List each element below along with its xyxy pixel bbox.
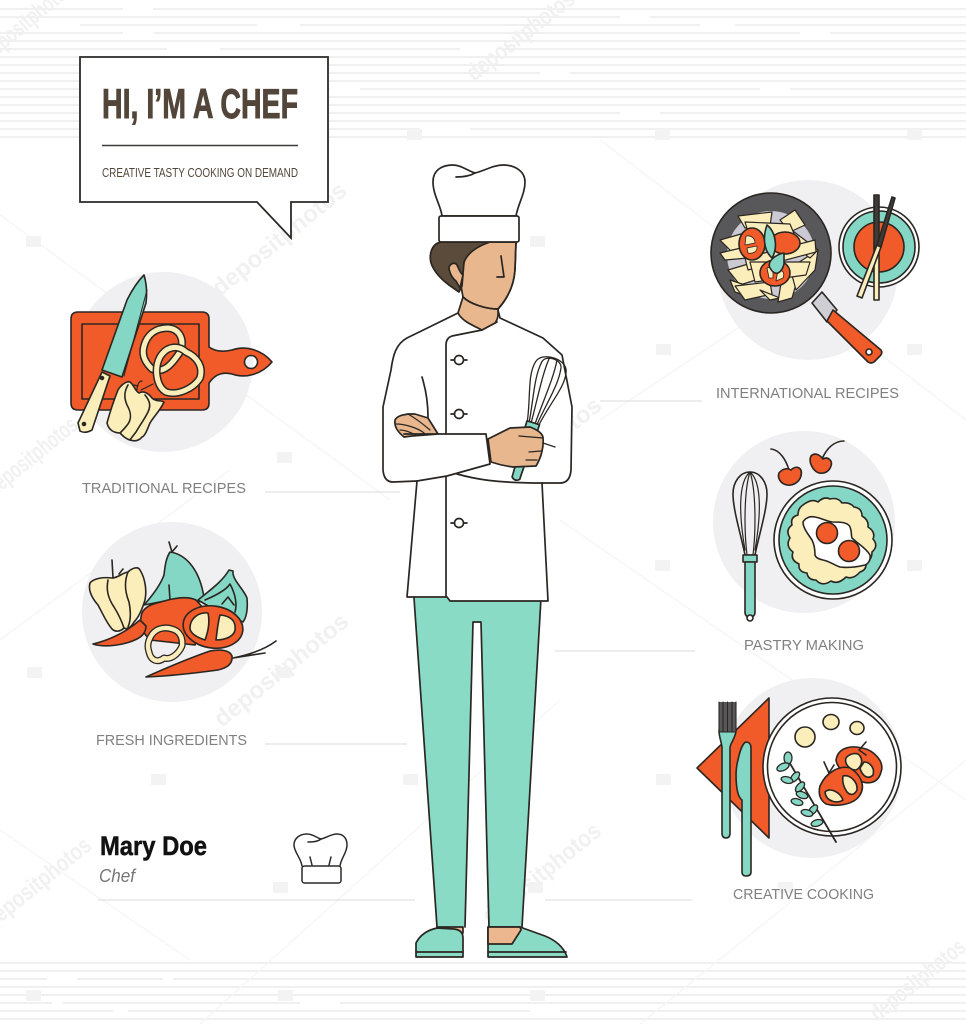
icon: yellow pepper <box>89 560 146 631</box>
panel: fresh ingredients <box>82 522 276 749</box>
icon: cut tomato <box>180 602 246 652</box>
speech bubble title card <box>80 57 328 238</box>
icon: bowl with chopsticks <box>839 195 919 300</box>
text: depositphotos <box>207 177 352 302</box>
shoes <box>416 927 567 957</box>
icon: pan handle <box>812 292 882 363</box>
panel: pastry making <box>713 431 895 654</box>
panel: international recipes <box>711 180 919 402</box>
tomato slices <box>819 742 882 805</box>
chef figure <box>383 165 572 957</box>
role: Chef <box>99 866 137 886</box>
icon: carrot <box>146 641 276 677</box>
text: depositphotos <box>477 817 606 930</box>
title: HI, I’M A CHEF <box>102 80 298 127</box>
icon: chef hat <box>294 834 347 883</box>
chef hat <box>433 165 525 242</box>
icon: sliced pepper <box>107 381 164 441</box>
basil leaves <box>764 225 784 273</box>
icon: teal squash <box>144 542 205 605</box>
icon: whole tomato <box>141 598 205 645</box>
panel: traditional recipes <box>71 272 272 497</box>
name: Mary Doe <box>100 831 207 861</box>
icon: pepper rings <box>143 328 201 393</box>
whisk in hand <box>499 353 570 485</box>
jacket <box>383 310 572 601</box>
icon: frying pan with pasta <box>711 193 831 313</box>
icon: plate of eggs <box>774 481 892 599</box>
panel: creative cooking <box>697 678 902 903</box>
herb sprig <box>776 752 836 842</box>
label: TRADITIONAL RECIPES <box>82 481 246 497</box>
text: depositphotos <box>209 608 354 733</box>
label: FRESH INGREDIENTS <box>96 733 247 749</box>
icon: napkin <box>697 698 769 838</box>
icon: cherries <box>771 441 844 485</box>
icon: plate <box>763 698 901 842</box>
neck and face <box>458 242 516 330</box>
text: depositphotos <box>462 392 607 517</box>
icon: knife <box>78 275 147 432</box>
hair <box>430 242 490 292</box>
icon: pepper ring <box>148 628 182 661</box>
icon: cutting board <box>71 312 272 410</box>
icon: fork <box>719 702 736 838</box>
icon: onion <box>198 570 247 622</box>
tomato slices <box>739 228 800 286</box>
label: PASTRY MAKING <box>744 638 864 654</box>
label: INTERNATIONAL RECIPES <box>716 386 899 402</box>
crossed arms and hands <box>395 414 555 481</box>
trousers <box>414 598 541 927</box>
icon: knife <box>736 742 751 876</box>
jacket buttons <box>451 356 467 528</box>
icon: whisk <box>733 472 767 621</box>
label: CREATIVE COOKING <box>733 887 874 903</box>
icon: small carrot <box>93 620 146 646</box>
tagline: CREATIVE TASTY COOKING ON DEMAND <box>102 165 298 180</box>
panel: name block <box>99 831 347 886</box>
